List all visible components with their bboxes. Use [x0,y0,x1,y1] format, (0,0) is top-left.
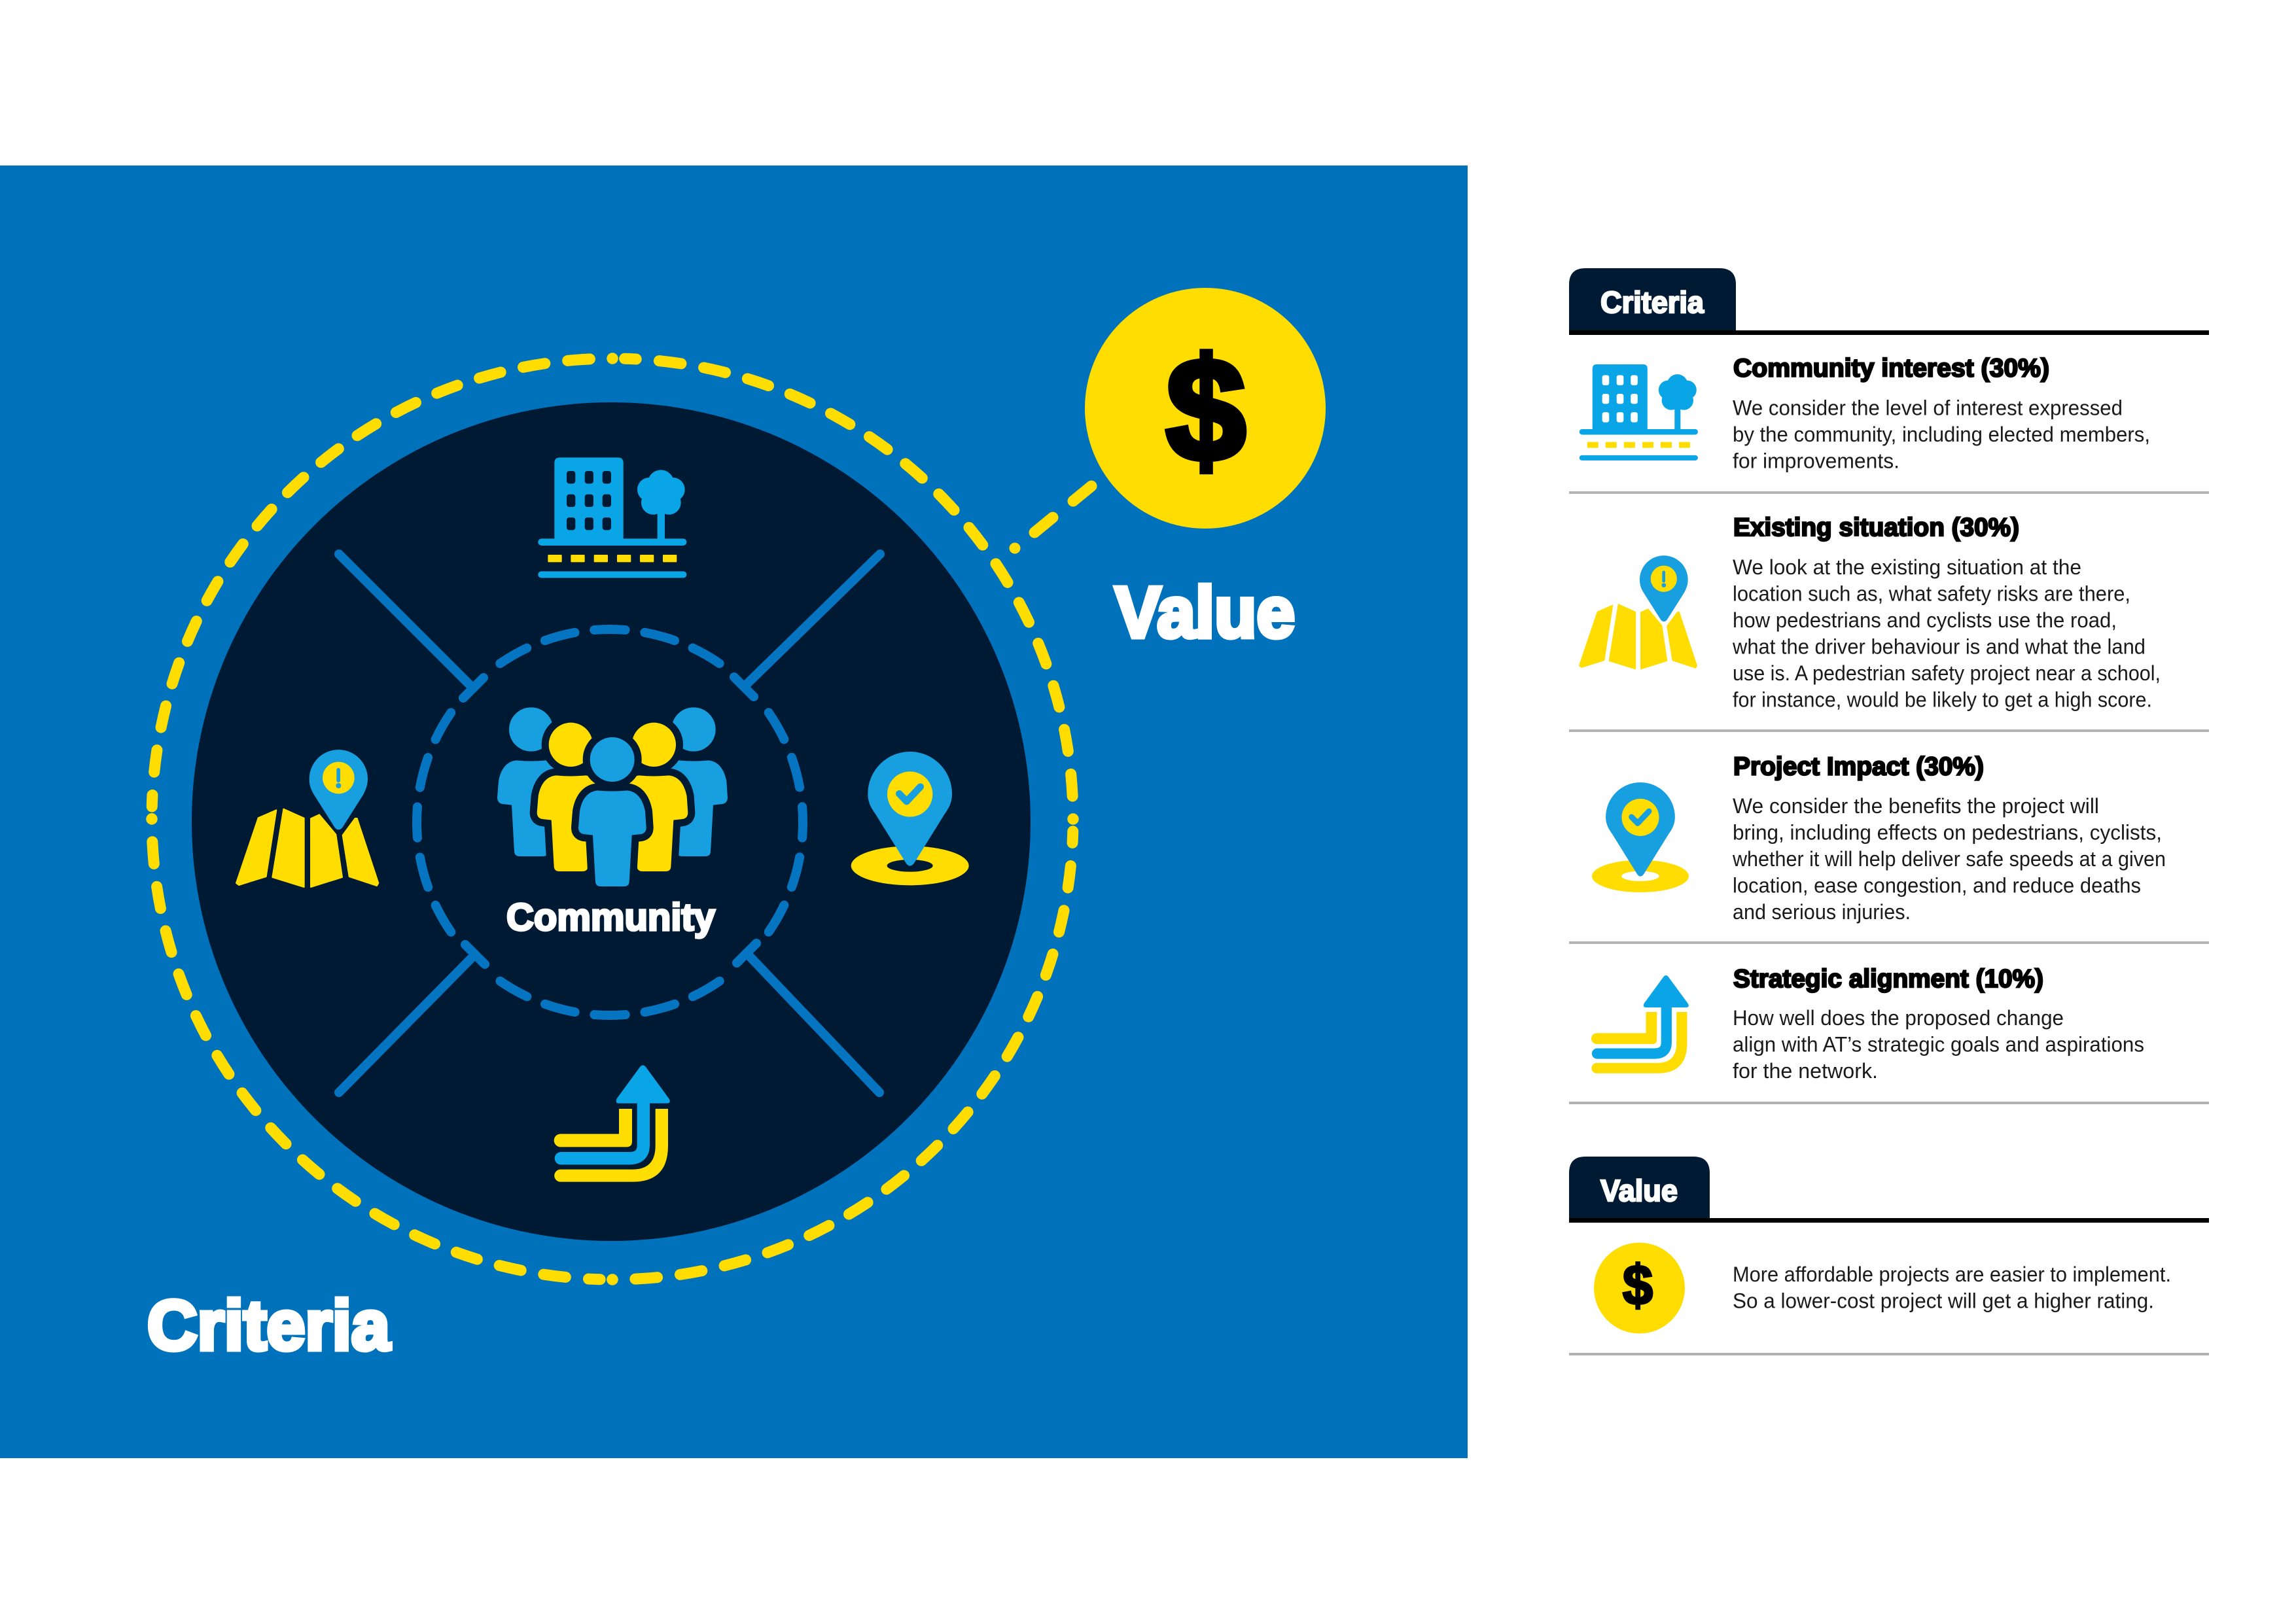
row body text: So a lower-cost project will get a higher rating. [1733,1289,2154,1312]
side icon: dollar circle [1594,1243,1685,1333]
row: value [1594,1243,2171,1333]
four spokes with T ends [339,554,880,1092]
row: community interest [1580,355,2150,472]
side icon: dollar circle: $ [1623,1254,1653,1317]
row: project impact [1592,752,2166,924]
row body text: We look at the existing situation at the [1733,555,2081,579]
row body text: How well does the proposed change [1733,1006,2064,1030]
panel: blue diagram background [0,166,1468,1458]
inner dashed community ring [417,629,803,1015]
row body text: bring, including effects on pedestrians, cyclists, [1733,820,2162,844]
row body text [1732,794,2166,924]
yellow dashed value ring [146,353,1079,1285]
row body text: what the driver behaviour is and what the land [1732,635,2146,658]
row body text: More affordable projects are easier to implement. [1733,1263,2171,1286]
row body text [1732,555,2161,712]
value circle with dollar sign [1085,288,1326,529]
side icon: merging arrow [1591,975,1689,1073]
row body text: for instance, would be likely to get a high score. [1733,688,2152,712]
tab: Criteria [1569,268,1736,331]
tab: Value: Value [1600,1174,1678,1208]
icon: building, tree and road [538,457,686,578]
value circle with dollar sign: $ [1166,328,1246,492]
row body text: whether it will help deliver safe speeds at a given [1732,847,2166,871]
side icon: map with pin [1580,555,1697,669]
row heading: Project Impact (30%) [1733,752,1984,781]
heading: Value: Value [1115,572,1295,653]
tab: Value [1569,1157,1710,1218]
side icon: building [1580,364,1698,461]
row body text: and serious injuries. [1733,900,1911,924]
row body text [1733,396,2150,472]
row body text: We consider the benefits the project will [1733,794,2099,818]
icon: community people [497,707,728,886]
row body text: We consider the level of interest expressed [1733,396,2123,420]
row heading: Strategic alignment (10%) [1733,965,2043,993]
row body text [1733,1006,2144,1083]
rule under Criteria tab [1569,330,2209,335]
row body text: location such as, what safety risks are there, [1733,582,2130,606]
row body text: location, ease congestion, and reduce deaths [1733,874,2141,898]
icon: location pin with check [851,752,969,885]
row body text: how pedestrians and cyclists use the road, [1733,608,2117,632]
dark criteria circle [192,402,1031,1241]
row body text [1733,1263,2171,1312]
row body text: for improvements. [1733,449,1899,472]
row body text: use is. A pedestrian safety project near a school, [1733,661,2161,685]
icon: map with warning pin [236,750,378,887]
icon: merging arrow [554,1065,670,1182]
row body text: by the community, including elected members, [1733,423,2150,446]
row: strategic alignment [1591,965,2144,1083]
tab: Criteria: Criteria [1600,285,1704,319]
row heading: Existing situation (30%) [1733,514,2019,542]
row: existing situation [1580,514,2161,712]
side icon: check pin [1592,782,1689,892]
row body text: for the network. [1733,1059,1878,1083]
heading: Criteria: Criteria [147,1285,391,1365]
connector from ring to value circle [1015,486,1091,548]
rule under Value tab [1569,1218,2209,1223]
row heading: Community interest (30%) [1733,355,2049,382]
label: Community: Community [506,896,715,939]
row body text: align with AT’s strategic goals and aspirations [1733,1032,2144,1056]
